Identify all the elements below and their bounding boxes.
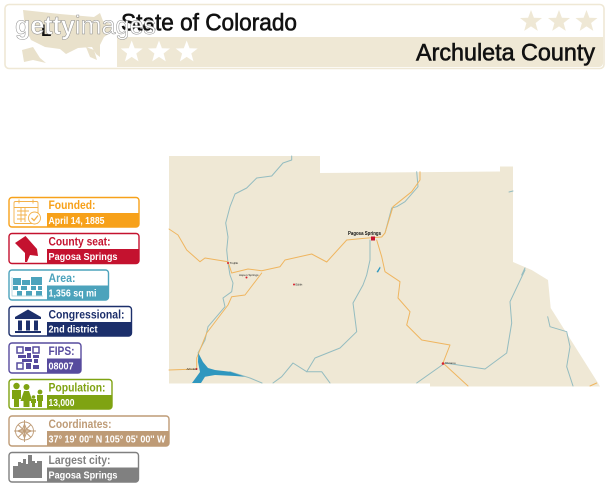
panel: county seat: [9, 234, 139, 264]
panel: largest city: [9, 452, 138, 482]
icon: compass rose: [14, 420, 36, 442]
icon: family: [12, 383, 43, 407]
panel: area: [9, 270, 108, 300]
icon: calendar: [14, 200, 40, 224]
value: 37° 19' 00'' N 105° 05' 00'' W: [48, 434, 166, 446]
header band: [117, 37, 603, 67]
value: Pagosa Springs: [48, 252, 118, 263]
panel: population: [9, 380, 112, 409]
town: Arboles: Arboles: [186, 367, 197, 371]
value: 2nd district: [48, 324, 98, 336]
roads: [169, 172, 597, 386]
label: Population:: [48, 382, 106, 394]
small lake: [376, 266, 380, 272]
map: Archuleta County: [169, 156, 600, 386]
clipped letter: L: [41, 21, 51, 40]
panel: founded: [9, 198, 139, 227]
icon: QR code: [17, 347, 39, 369]
town: Pagosa Springs: [348, 231, 381, 240]
panel: FIPS: [9, 343, 81, 373]
label: FIPS:: [48, 346, 74, 358]
icon: skyline: [13, 455, 42, 478]
town: Trujillo: Trujillo: [230, 261, 239, 265]
title: county: Archuleta County: [416, 40, 595, 66]
value: 1,356 sq mi: [48, 288, 97, 300]
county shape: [169, 156, 600, 386]
town: Pagosa Springs: Pagosa Springs: [348, 231, 381, 237]
icon: US map silhouette: [22, 10, 113, 63]
watermark: gettyimages: [15, 10, 156, 40]
icon: capitol building: [15, 310, 41, 333]
icon: area grid: [12, 277, 43, 296]
header banner: [5, 4, 604, 68]
reservoir: [192, 353, 245, 383]
label: Area:: [48, 273, 76, 285]
stars left: [121, 40, 198, 61]
title: state: State of Colorado: [121, 10, 297, 36]
value: Pagosa Springs: [48, 470, 118, 482]
value: 13,000: [48, 398, 75, 409]
label: Largest city:: [48, 455, 110, 467]
label: Congressional:: [48, 310, 124, 322]
town: Aspen Springs: Aspen Springs: [239, 273, 259, 277]
panel: congressional: [9, 306, 132, 336]
value: April 14, 1885: [48, 216, 105, 227]
label: Coordinates:: [48, 419, 112, 431]
value: 08007: [48, 362, 74, 372]
rivers: [198, 156, 573, 386]
stars right: [520, 10, 598, 31]
panel: coordinates: [9, 416, 169, 446]
town: Edith: Edith: [296, 282, 303, 286]
town: Chromo: Chromo: [445, 361, 456, 365]
label: County seat:: [48, 236, 110, 248]
icon: county shape: [15, 236, 38, 262]
label: Founded:: [48, 200, 96, 212]
